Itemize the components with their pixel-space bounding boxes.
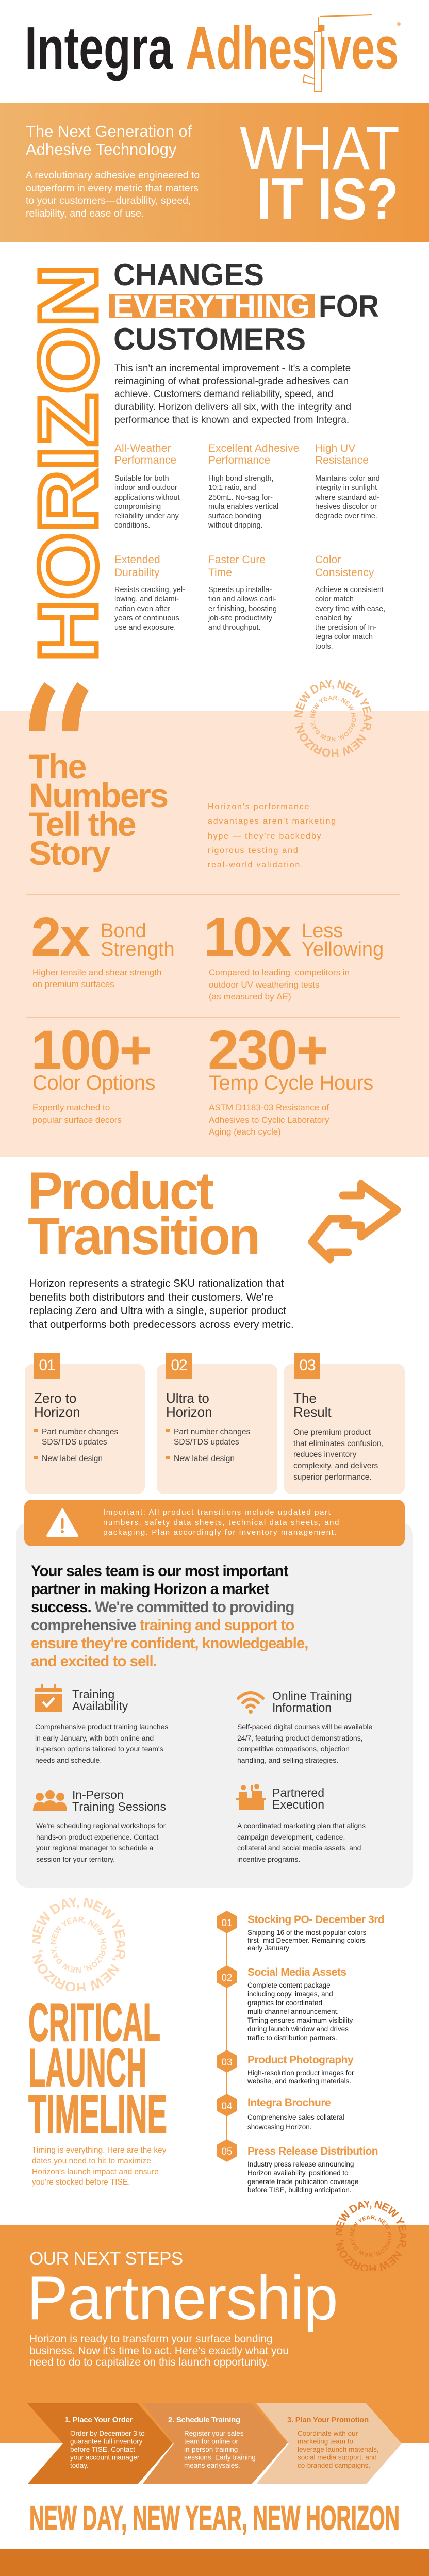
badge: 02 bbox=[166, 1353, 192, 1379]
stat: 2x: Strength bbox=[101, 939, 175, 960]
step 02 bbox=[216, 1965, 422, 2048]
step 05: before TISE, building anticipation. bbox=[248, 2186, 352, 2194]
icon: podium bbox=[236, 1784, 266, 1810]
feature: all-weather: indoor and outdoor bbox=[114, 484, 177, 492]
item: in-person: hands-on product experience. Contact bbox=[36, 1833, 158, 1841]
text: intro: outperform in every metric that matters bbox=[26, 183, 199, 194]
heading: next generation bbox=[26, 122, 192, 158]
stat: 10x: Less bbox=[302, 920, 343, 942]
text: changes body: This isn't an incremental improvement - It's a complete bbox=[114, 363, 351, 374]
chevron 1: your account manager bbox=[70, 2454, 140, 2461]
feature: color: tegra color match bbox=[315, 633, 373, 641]
stat: 230+: Temp Cycle Hours bbox=[209, 1072, 373, 1094]
step 01 bbox=[217, 1911, 384, 1952]
item: training availability: in early January, with both online and bbox=[35, 1734, 154, 1742]
step 05 bbox=[216, 2139, 422, 2196]
stat: 100+: Expertly matched to bbox=[32, 1103, 110, 1112]
stat: 100+: 100+ bbox=[31, 1019, 150, 1081]
text: changes body: performance that is known and expected from Integra. bbox=[114, 415, 349, 425]
heading: next generation: Adhesive Technology bbox=[26, 140, 176, 158]
card: ultra to horizon bbox=[157, 1364, 277, 1494]
item: in-person: Training Sessions bbox=[72, 1800, 166, 1813]
feature: durability: nation even after bbox=[114, 605, 170, 613]
chevron 2: team for online or bbox=[184, 2437, 239, 2446]
feature: cure: tion and allows earli- bbox=[208, 595, 276, 603]
step 02: traffic to distribution partners. bbox=[248, 2034, 337, 2042]
feature: color: enabled by bbox=[315, 614, 352, 622]
stat: 2x: on premium surfaces bbox=[32, 979, 114, 989]
stat: 10x: outdoor UV weathering tests bbox=[209, 980, 320, 989]
heading: changes everything: EVERYTHING bbox=[113, 289, 310, 323]
card: the result: that eliminates confusion, bbox=[293, 1439, 384, 1448]
text: timing bbox=[32, 2146, 166, 2187]
item: online training: Self-paced digital courses will be available bbox=[237, 1722, 372, 1731]
item: online training: competitive comparisons, objection bbox=[237, 1745, 350, 1753]
feature: uv: Maintains color and bbox=[315, 474, 380, 483]
text: intro: A revolutionary adhesive engineered to bbox=[26, 170, 200, 181]
card: ultra to horizon: Ultra to bbox=[166, 1390, 209, 1406]
chevron 2: sessions. Early training bbox=[184, 2454, 256, 2461]
text: timing: Horizon's launch impact and ensure bbox=[32, 2168, 159, 2176]
item: partnered execution: Execution bbox=[272, 1798, 324, 1811]
heading: changes everything: CHANGES bbox=[113, 258, 264, 292]
heading: critical launch timeline bbox=[28, 1998, 167, 2138]
step 01: first- mid December. Remaining colors bbox=[248, 1937, 366, 1944]
heading: changes everything: FOR bbox=[319, 289, 379, 323]
heading: product transition: Transition bbox=[28, 1207, 258, 1266]
feature: color: the precision of In- bbox=[315, 624, 376, 632]
item: partnered execution: collateral and social media assets, and bbox=[237, 1844, 361, 1852]
feature: uv: degrade over time. bbox=[315, 512, 377, 520]
callout: important bbox=[24, 1500, 405, 1546]
text: changes body: reimagining of what professional-grade adhesives can bbox=[114, 376, 349, 387]
text: transition body: that outperforms both predecessors across every metric. bbox=[29, 1319, 294, 1331]
feature: all-weather: Performance bbox=[114, 454, 176, 466]
chevron 3 bbox=[256, 2403, 402, 2484]
chevron 2: means earlysales. bbox=[184, 2462, 240, 2469]
callout: important: Important: All product transitions include updated part bbox=[103, 1508, 331, 1517]
heading: numbers tell the story bbox=[29, 747, 168, 872]
footer bar bbox=[0, 2549, 429, 2576]
step 04: Comprehensive sales collateral bbox=[248, 2113, 344, 2121]
item: in-person: your regional manager to schedule a bbox=[36, 1844, 153, 1852]
badge: new day circle 3: NEW YEAR, NEW HORIZON, NEW DAY, bbox=[350, 2215, 392, 2257]
feature: all-weather bbox=[114, 442, 180, 530]
item: training availability: needs and schedule. bbox=[35, 1756, 102, 1764]
stat: 2x bbox=[31, 907, 175, 989]
step 02: Timing ensures maximum visibility bbox=[248, 2016, 353, 2024]
text: intro: to your customers—durability, speed, bbox=[26, 195, 191, 206]
text: numbers intro: Horizon's performance bbox=[208, 802, 310, 811]
item: training availability: Availability bbox=[72, 1699, 128, 1713]
icon: calendar bbox=[35, 1684, 62, 1712]
chevron 1: today. bbox=[70, 2462, 89, 2469]
feature: adhesive: High bond strength, bbox=[208, 474, 274, 483]
card: the result: complexity, and delivers bbox=[293, 1462, 378, 1470]
chevron 3: Coordinate with our bbox=[298, 2430, 358, 2437]
text: numbers intro bbox=[208, 802, 337, 869]
heading: sales team: success. We're committed to providing bbox=[31, 1599, 294, 1616]
stat: 100+: Color Options bbox=[32, 1072, 155, 1094]
feature: adhesive: 250mL. No-sag for- bbox=[208, 494, 273, 502]
stat: 230+: Adhesives to Cyclic Laboratory bbox=[209, 1115, 329, 1124]
chevron 1: 1. Place Your Order bbox=[64, 2416, 133, 2424]
step 03: Product Photography bbox=[248, 2054, 353, 2066]
card: ultra to horizon: SDS/TDS updates bbox=[174, 1438, 239, 1447]
panel: numbers bbox=[0, 711, 429, 1157]
heading: partnership: Partnership bbox=[27, 2263, 338, 2333]
step 02: multi-channel announcement. bbox=[248, 2008, 339, 2015]
card: zero to horizon: Zero to bbox=[34, 1390, 76, 1406]
logo bbox=[25, 14, 401, 92]
item: online training bbox=[237, 1689, 372, 1764]
card: ultra to horizon: Horizon bbox=[166, 1404, 212, 1420]
feature: uv: integrity in sunlight bbox=[315, 484, 377, 492]
panel: what it is bbox=[0, 103, 429, 242]
item: partnered execution: campaign development, cadence, bbox=[237, 1833, 345, 1841]
feature: cure: Time bbox=[208, 567, 232, 579]
feature: durability bbox=[114, 554, 185, 632]
feature: all-weather: applications without bbox=[114, 494, 180, 502]
feature: all-weather: Suitable for both bbox=[114, 474, 169, 483]
badge: new day circle 2: NEW YEAR, NEW HORIZON, NEW DAY, bbox=[51, 1916, 106, 1973]
badge: 03: 03 bbox=[299, 1357, 316, 1374]
feature: cure: and throughput. bbox=[208, 624, 261, 632]
text: timing: dates you need to hit to maximize bbox=[32, 2157, 151, 2165]
chevron 2: 2. Schedule Training bbox=[168, 2416, 240, 2424]
feature: uv: High UV bbox=[315, 442, 355, 454]
feature: color: Consistency bbox=[315, 567, 374, 579]
step 01: 01 bbox=[221, 1918, 233, 1929]
chevron 3: co-branded campaigns. bbox=[298, 2462, 370, 2469]
text: timing: you're stocked before TISE. bbox=[32, 2178, 130, 2187]
step 01: Shipping 16 of the most popular colors bbox=[248, 1929, 366, 1937]
badge: 02: 02 bbox=[171, 1357, 187, 1374]
step 05: Press Release Distribution bbox=[248, 2145, 378, 2157]
card: the result: One premium product bbox=[293, 1428, 371, 1437]
feature: color: every time with ease, bbox=[315, 605, 385, 613]
heading: sales team: Your sales team is our most important bbox=[31, 1563, 288, 1580]
step 02: 02 bbox=[221, 1973, 233, 1983]
logo: ® bbox=[397, 22, 401, 27]
card: ultra to horizon: New label design bbox=[174, 1454, 235, 1463]
item: in-person: We're scheduling regional workshops for bbox=[36, 1822, 166, 1830]
heading: what it is bbox=[240, 114, 400, 232]
text: numbers intro: rigorous testing and bbox=[208, 846, 299, 855]
callout: important: packaging. Plan accordingly for inventory management. bbox=[103, 1528, 337, 1537]
step 04: 04 bbox=[221, 2101, 233, 2112]
feature: color: Achieve a consistent bbox=[315, 586, 384, 594]
feature: color: Color bbox=[315, 554, 341, 566]
item: online training: Information bbox=[272, 1701, 332, 1714]
badge: new day circle 1: NEW YEAR, NEW HORIZON, NEW DAY, bbox=[310, 695, 356, 742]
feature: adhesive: Performance bbox=[208, 454, 270, 466]
text: changes body: achieve. Customers demand reliability, speed, and bbox=[114, 389, 333, 400]
step 05: 05 bbox=[221, 2146, 233, 2157]
feature: color bbox=[315, 554, 385, 651]
step 03: 03 bbox=[221, 2057, 233, 2068]
stat: 10x bbox=[204, 907, 384, 1002]
step 02: graphics for coordinated bbox=[248, 1999, 322, 2007]
step 02: Social Media Assets bbox=[248, 1966, 346, 1978]
text: numbers intro: hype — they're backedby bbox=[208, 832, 322, 841]
heading: numbers tell the story: Tell the bbox=[29, 805, 135, 843]
text: partnership body bbox=[29, 2334, 359, 2368]
step 05: Horizon availability, positioned to bbox=[248, 2169, 349, 2177]
feature: uv bbox=[315, 442, 380, 520]
feature: all-weather: reliability under any bbox=[114, 512, 179, 520]
step 01: Stocking PO- December 3rd bbox=[248, 1914, 384, 1926]
feature: adhesive: without dripping. bbox=[208, 521, 263, 530]
badge: 03 bbox=[294, 1353, 320, 1379]
feature: cure: Speeds up installa- bbox=[208, 586, 272, 594]
heading: changes everything: CUSTOMERS bbox=[113, 322, 306, 356]
card: ultra to horizon: Part number changes bbox=[174, 1428, 250, 1436]
stat: 2x: Bond bbox=[101, 920, 146, 942]
item: partnered execution: incentive programs. bbox=[237, 1855, 300, 1863]
text: changes body bbox=[114, 363, 351, 425]
feature: color: tools. bbox=[315, 643, 333, 651]
item: in-person: session for your territory. bbox=[36, 1855, 115, 1863]
stat: 10x: (as measured by ΔE) bbox=[209, 992, 291, 1002]
text: partnership body: business. Now it's time to act. Here's exactly what you bbox=[29, 2344, 289, 2357]
feature: all-weather: conditions. bbox=[114, 521, 150, 530]
card: the result: The bbox=[293, 1390, 317, 1406]
heading: product transition: Product bbox=[28, 1161, 212, 1220]
chevron 1: Order by December 3 to bbox=[70, 2430, 145, 2437]
heading: what it is: IT IS? bbox=[257, 167, 399, 232]
item: online training: Online Training bbox=[272, 1689, 352, 1702]
feature: adhesive: mula enables vertical bbox=[208, 503, 278, 511]
step 01: early January bbox=[248, 1944, 289, 1952]
card: zero to horizon bbox=[25, 1364, 145, 1494]
heading: numbers tell the story: Story bbox=[29, 834, 109, 872]
text: transition body: Horizon represents a strategic SKU rationalization that bbox=[29, 1277, 284, 1289]
step 05: generate trade publication coverage bbox=[248, 2178, 358, 2186]
feature: durability: use and exposure. bbox=[114, 624, 176, 632]
feature: durability: Resists cracking, yel- bbox=[114, 586, 185, 594]
feature: adhesive: 10:1 ratio, and bbox=[208, 484, 256, 492]
feature: durability: Extended bbox=[114, 554, 160, 566]
stat: 10x: 10x bbox=[204, 907, 290, 967]
feature: color: color match bbox=[315, 595, 354, 603]
feature: adhesive: Excellent Adhesive bbox=[208, 442, 299, 454]
item: in-person: In-Person bbox=[72, 1788, 124, 1801]
chevron 1: before TISE. Contact bbox=[70, 2446, 135, 2453]
text: partnership body: Horizon is ready to transform your surface bonding bbox=[29, 2333, 273, 2345]
step 05: Industry press release announcing bbox=[248, 2160, 354, 2168]
chevron 3: marketing team to bbox=[298, 2437, 353, 2446]
chevrons: next steps bbox=[0, 2401, 429, 2488]
item: partnered execution bbox=[236, 1784, 366, 1863]
heading: sales team: and excited to sell. bbox=[31, 1653, 157, 1670]
feature: cure: Faster Cure bbox=[208, 554, 266, 566]
feature: cure bbox=[208, 554, 277, 632]
heading: product transition bbox=[28, 1161, 258, 1266]
text: transition body: benefits both distributors and their customers. We're bbox=[29, 1291, 273, 1303]
icon: swap arrows bbox=[308, 1180, 401, 1264]
text: timing: Timing is everything. Here are the key bbox=[32, 2146, 166, 2155]
card: the result: reduces inventory bbox=[293, 1450, 356, 1459]
icon: wifi bbox=[237, 1691, 265, 1714]
step 04: Integra Brochure bbox=[248, 2097, 331, 2109]
stat: 2x: Higher tensile and shear strength bbox=[32, 967, 161, 977]
step 03: website, and marketing materials. bbox=[248, 2077, 351, 2085]
card: zero to horizon: New label design bbox=[42, 1454, 103, 1463]
chevron 3: leverage launch materials, bbox=[298, 2446, 379, 2453]
icon: quote marks bbox=[29, 682, 89, 731]
feature: uv: where standard ad- bbox=[315, 494, 380, 502]
feature: uv: Resistance bbox=[315, 454, 369, 466]
chevron 2: Register your sales bbox=[184, 2430, 244, 2437]
card: zero to horizon: SDS/TDS updates bbox=[42, 1438, 107, 1447]
step 02: during launch window and drives bbox=[248, 2025, 349, 2033]
timeline bbox=[217, 1911, 384, 2194]
stat: 230+ bbox=[208, 1019, 373, 1137]
heading: next generation: The Next Generation of bbox=[26, 122, 192, 140]
text: numbers intro: real-world validation. bbox=[208, 861, 304, 869]
text: partnership body: need to do to capitalize on this launch opportunity. bbox=[29, 2356, 269, 2368]
chevron 2 bbox=[142, 2403, 287, 2484]
stat: 100+: popular surface decors bbox=[32, 1115, 122, 1125]
chevron 2: in-person training bbox=[184, 2446, 238, 2453]
panel: sales team bbox=[16, 1523, 413, 1888]
heading: sales team bbox=[31, 1563, 308, 1670]
feature: durability: Durability bbox=[114, 567, 160, 579]
step 02: Complete content package bbox=[248, 1981, 331, 1989]
stat: 230+: 230+ bbox=[208, 1019, 327, 1081]
chevron 1 bbox=[27, 2403, 173, 2484]
item: training availability: Comprehensive product training launches bbox=[35, 1722, 168, 1731]
heading: changes everything bbox=[109, 258, 379, 356]
step 02: including copy, images, and bbox=[248, 1990, 333, 1998]
step 04: showcasing Horizon. bbox=[248, 2123, 312, 2131]
text: transition body: replacing Zero and Ultra with a single, superior product bbox=[29, 1305, 286, 1317]
item: partnered execution: A coordinated marketing plan that aligns bbox=[237, 1822, 366, 1830]
step 03: High-resolution product images for bbox=[248, 2069, 354, 2077]
feature: durability: lowing, and delami- bbox=[114, 595, 179, 603]
stat: 100+ bbox=[31, 1019, 155, 1125]
heading: numbers tell the story: Numbers bbox=[29, 776, 168, 814]
chevron 3: social media support, and bbox=[298, 2454, 377, 2461]
item: training availability: in-person options tailored to your team's bbox=[35, 1745, 163, 1753]
feature: all-weather: compromising bbox=[114, 503, 161, 511]
stat: 2x: 2x bbox=[31, 907, 89, 967]
heading: our next steps: OUR NEXT STEPS bbox=[29, 2249, 183, 2269]
stat: 230+: Aging (each cycle) bbox=[209, 1127, 281, 1137]
logo: Integra bbox=[25, 14, 173, 81]
callout: important: numbers, safety data sheets, technical data sheets, and bbox=[103, 1518, 340, 1527]
feature: adhesive bbox=[208, 442, 299, 530]
item: online training: handling, and selling strategies. bbox=[237, 1756, 338, 1764]
feature: uv: hesives discolor or bbox=[315, 503, 377, 511]
text: intro bbox=[26, 170, 200, 219]
heading: sales team: ensure they're confident, knowledgeable, bbox=[31, 1635, 308, 1652]
feature: cure: er finishing, boosting bbox=[208, 605, 277, 613]
heading: numbers tell the story: The bbox=[29, 747, 86, 785]
card: the result: Result bbox=[293, 1404, 332, 1420]
badge: 01: 01 bbox=[39, 1357, 55, 1374]
heading: sales team: partner in making Horizon a market bbox=[31, 1581, 269, 1598]
text: intro: reliability, and ease of use. bbox=[26, 207, 144, 219]
item: training availability bbox=[35, 1684, 168, 1764]
card: the result: superior performance. bbox=[293, 1473, 372, 1482]
features grid bbox=[114, 442, 385, 651]
text: transition body bbox=[29, 1277, 294, 1331]
item: training availability: Training bbox=[72, 1687, 114, 1701]
feature: adhesive: surface bonding bbox=[208, 512, 261, 520]
icon: warning bbox=[46, 1508, 78, 1537]
chevron 1: guarantee full inventory bbox=[70, 2437, 143, 2446]
text: numbers intro: advantages aren't marketing bbox=[208, 817, 337, 826]
stat: 230+: ASTM D1183-03 Resistance of bbox=[209, 1103, 329, 1112]
heading: what it is: WHAT bbox=[240, 114, 400, 183]
item: online training: 24/7, featuring product demonstrations, bbox=[237, 1734, 363, 1742]
text: changes body: durability. Horizon delivers all six, with the integrity and bbox=[114, 402, 351, 413]
card: zero to horizon: Horizon bbox=[34, 1404, 80, 1420]
heading: sales team: comprehensive training and support to bbox=[31, 1617, 294, 1634]
card: the result bbox=[284, 1364, 405, 1494]
panel: partnership bbox=[0, 2225, 429, 2443]
feature: durability: years of continuous bbox=[114, 614, 179, 622]
icon: people bbox=[33, 1790, 67, 1811]
step 03 bbox=[216, 2050, 422, 2091]
step 04 bbox=[216, 2094, 422, 2135]
feature: all-weather: All-Weather bbox=[114, 442, 171, 454]
stat: 10x: Yellowing bbox=[302, 939, 384, 960]
card: zero to horizon: Part number changes bbox=[42, 1428, 118, 1436]
feature: cure: job-site productivity bbox=[208, 614, 272, 622]
badge: 01 bbox=[34, 1353, 60, 1379]
stat: 10x: Compared to leading competitors in bbox=[209, 967, 350, 977]
item: in-person bbox=[33, 1788, 166, 1863]
item: partnered execution: Partnered bbox=[272, 1786, 324, 1799]
chevron 3: 3. Plan Your Promotion bbox=[287, 2416, 369, 2424]
